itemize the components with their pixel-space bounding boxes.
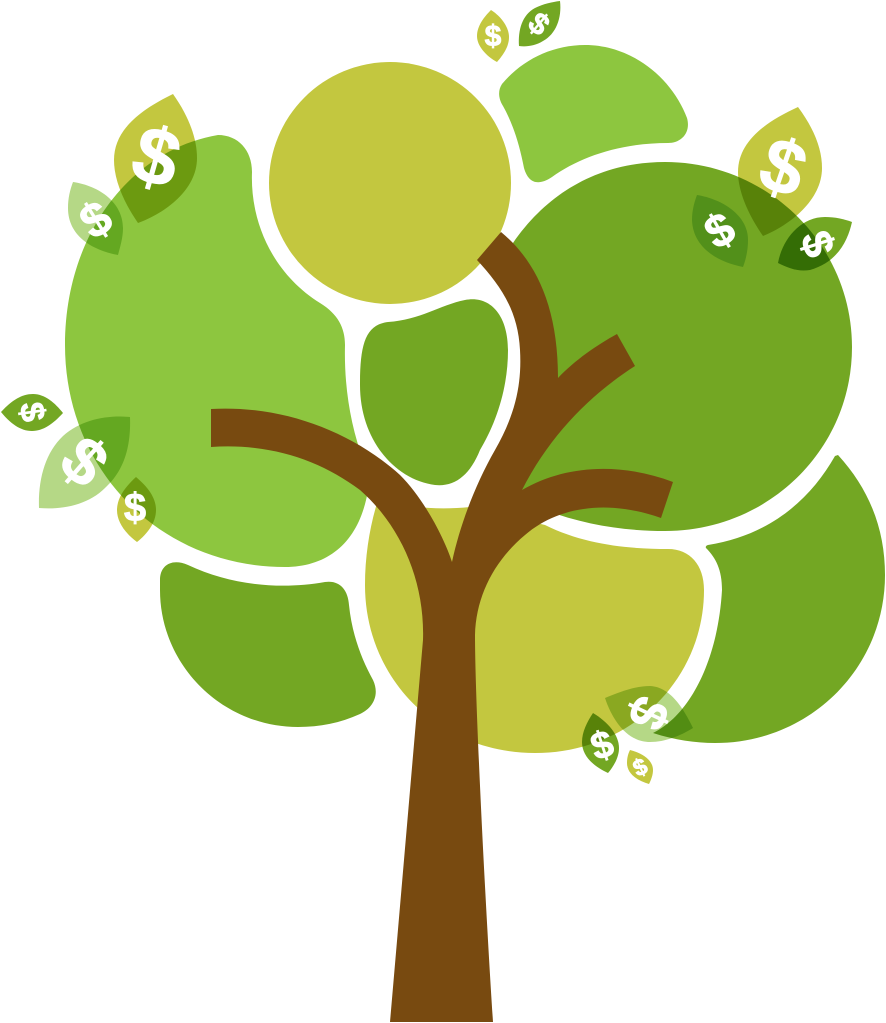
leaf: green far left [1,394,63,431]
leaf: green far left: $ [12,400,52,424]
leaf: large pale left: $ [47,421,123,501]
leaf: darkest green far right: $ [790,225,844,263]
leaf: darkest green far right [778,217,852,271]
leaf: pale left: $ [71,191,122,250]
leaf: olive left: $ [124,486,146,530]
leaf: small olive bottom: $ [629,752,651,781]
leaf: large olive top left: $ [123,108,190,205]
leaf: olive top: $ [485,20,502,53]
leaf: large olive top left [114,94,197,223]
tree trunk and branches [211,232,673,1022]
foliage: lower left blob [160,562,376,727]
foliage: large left blob [65,135,368,567]
leaf: dark green right [692,195,748,267]
foliage: bottom olive blob [365,500,704,753]
leaf: green top [519,1,560,46]
leaf: green top: $ [522,6,556,43]
leaf: dark green bottom: $ [586,723,619,769]
leaf: pale bottom [605,686,693,742]
foliage: lower right blob [653,455,885,743]
foliage: top olive circle [269,62,511,304]
leaf: olive left [117,477,156,542]
leaf: large olive top right: $ [749,120,817,215]
leaf: pale bottom: $ [616,688,680,738]
foliage: centre blob [360,299,508,485]
foliage: top light green blob [499,45,688,182]
leaf: dark green right: $ [695,201,744,259]
foliage: large right blob [513,162,852,531]
leaf: olive top [477,10,509,62]
leaf: large olive top right [738,107,822,236]
leaf: dark green bottom [582,713,619,773]
